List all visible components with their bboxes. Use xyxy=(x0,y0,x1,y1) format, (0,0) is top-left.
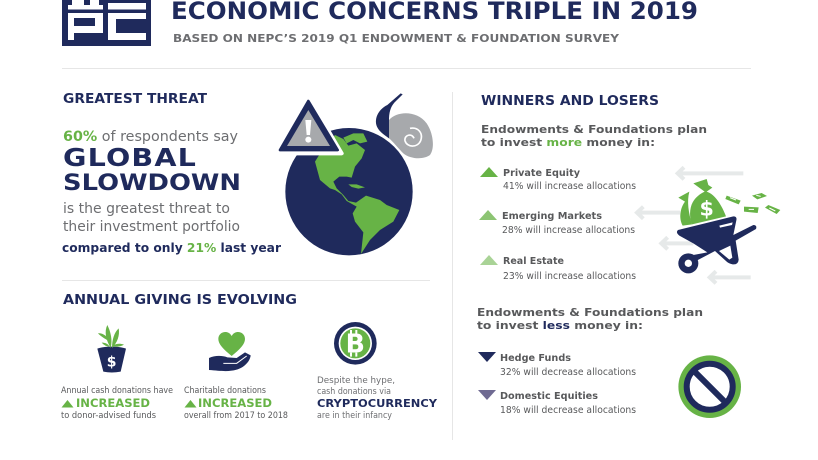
text: donor-advised funds: INCREASED xyxy=(76,396,150,410)
text: plan to invest less: to invest less money in: xyxy=(477,319,643,332)
subtitle: BASED ON NEPC’S 2019 Q1 ENDOWMENT & FOUNDATION SURVEY xyxy=(173,32,620,45)
logo: NEPC xyxy=(62,0,151,46)
text: plan to invest more xyxy=(481,123,707,149)
item: domestic equities: Domestic Equities xyxy=(500,391,598,402)
icon: wheelbarrow with money xyxy=(677,179,780,273)
item: real estate: Real Estate xyxy=(503,256,564,267)
text: global: GLOBAL xyxy=(63,143,197,172)
icon: heart in hand xyxy=(209,332,251,371)
item: hedge funds: 32% will decrease allocations xyxy=(500,367,636,378)
text: donor-advised funds: to donor-advised funds xyxy=(61,411,157,421)
icon: warning triangle xyxy=(277,97,342,153)
item: private equity: Private Equity xyxy=(503,168,581,179)
item: private equity xyxy=(480,167,636,192)
text: greatest threat line: is the greatest threat to xyxy=(63,201,230,217)
icon: arrows xyxy=(637,167,751,283)
item: emerging markets: 28% will increase allocations xyxy=(502,225,635,236)
text: plan to invest more: to invest more money in: xyxy=(481,136,655,149)
text: cryptocurrency: are in their infancy xyxy=(317,411,392,421)
text: slowdown: SLOWDOWN xyxy=(63,171,241,196)
text: cryptocurrency xyxy=(317,376,438,421)
text: charitable donations: overall from 2017 to 2018 xyxy=(184,411,288,421)
item: hedge funds xyxy=(478,352,636,378)
text: investment portfolio line: their investment portfolio xyxy=(63,219,240,235)
text: plan to invest less: Endowments & Foundations plan xyxy=(477,306,703,319)
item: private equity: 41% will increase allocations xyxy=(503,181,636,192)
item: emerging markets: Emerging Markets xyxy=(502,211,602,222)
heading: annual giving: ANNUAL GIVING IS EVOLVING xyxy=(63,293,297,308)
item: emerging markets xyxy=(479,210,635,236)
text: 60% of respondents: 60% of respondents say xyxy=(63,129,238,145)
text: donor-advised funds xyxy=(61,386,173,421)
text: donor-advised funds: Annual cash donations have xyxy=(61,386,173,396)
panel: greatest threat xyxy=(62,92,433,255)
icon: earth xyxy=(285,128,413,255)
panel: winners and losers xyxy=(477,94,780,418)
text: plan to invest more: Endowments & Foundations plan xyxy=(481,123,707,136)
icon: plant pot: $ xyxy=(107,355,117,371)
item: real estate: 23% will increase allocations xyxy=(503,271,636,282)
text: charitable donations: Charitable donations xyxy=(184,386,267,396)
heading: greatest threat: GREATEST THREAT xyxy=(63,92,207,107)
icon: bitcoin: B xyxy=(346,328,365,358)
icon: plant pot xyxy=(97,325,126,372)
icon: prohibition sign xyxy=(678,355,741,418)
text: plan to invest less xyxy=(477,306,703,332)
heading: winners and losers: WINNERS AND LOSERS xyxy=(481,94,659,109)
text: charitable donations: INCREASED xyxy=(198,396,272,410)
item: hedge funds: Hedge Funds xyxy=(500,353,571,364)
text: charitable donations xyxy=(184,386,288,421)
item: domestic equities: 18% will decrease allocations xyxy=(500,405,636,416)
text: compared to last year: compared to only 21% last year xyxy=(62,241,281,255)
text: cryptocurrency: cash donations via xyxy=(317,387,391,397)
text: cryptocurrency: Despite the hype, xyxy=(317,376,395,386)
panel: annual giving xyxy=(61,293,438,421)
icon: wheelbarrow with money: $ xyxy=(699,197,714,221)
text: cryptocurrency: CRYPTOCURRENCY xyxy=(317,397,438,410)
icon: snail xyxy=(376,93,433,158)
item: real estate xyxy=(480,255,636,282)
item: domestic equities xyxy=(478,390,636,416)
icon: bitcoin xyxy=(334,322,377,365)
